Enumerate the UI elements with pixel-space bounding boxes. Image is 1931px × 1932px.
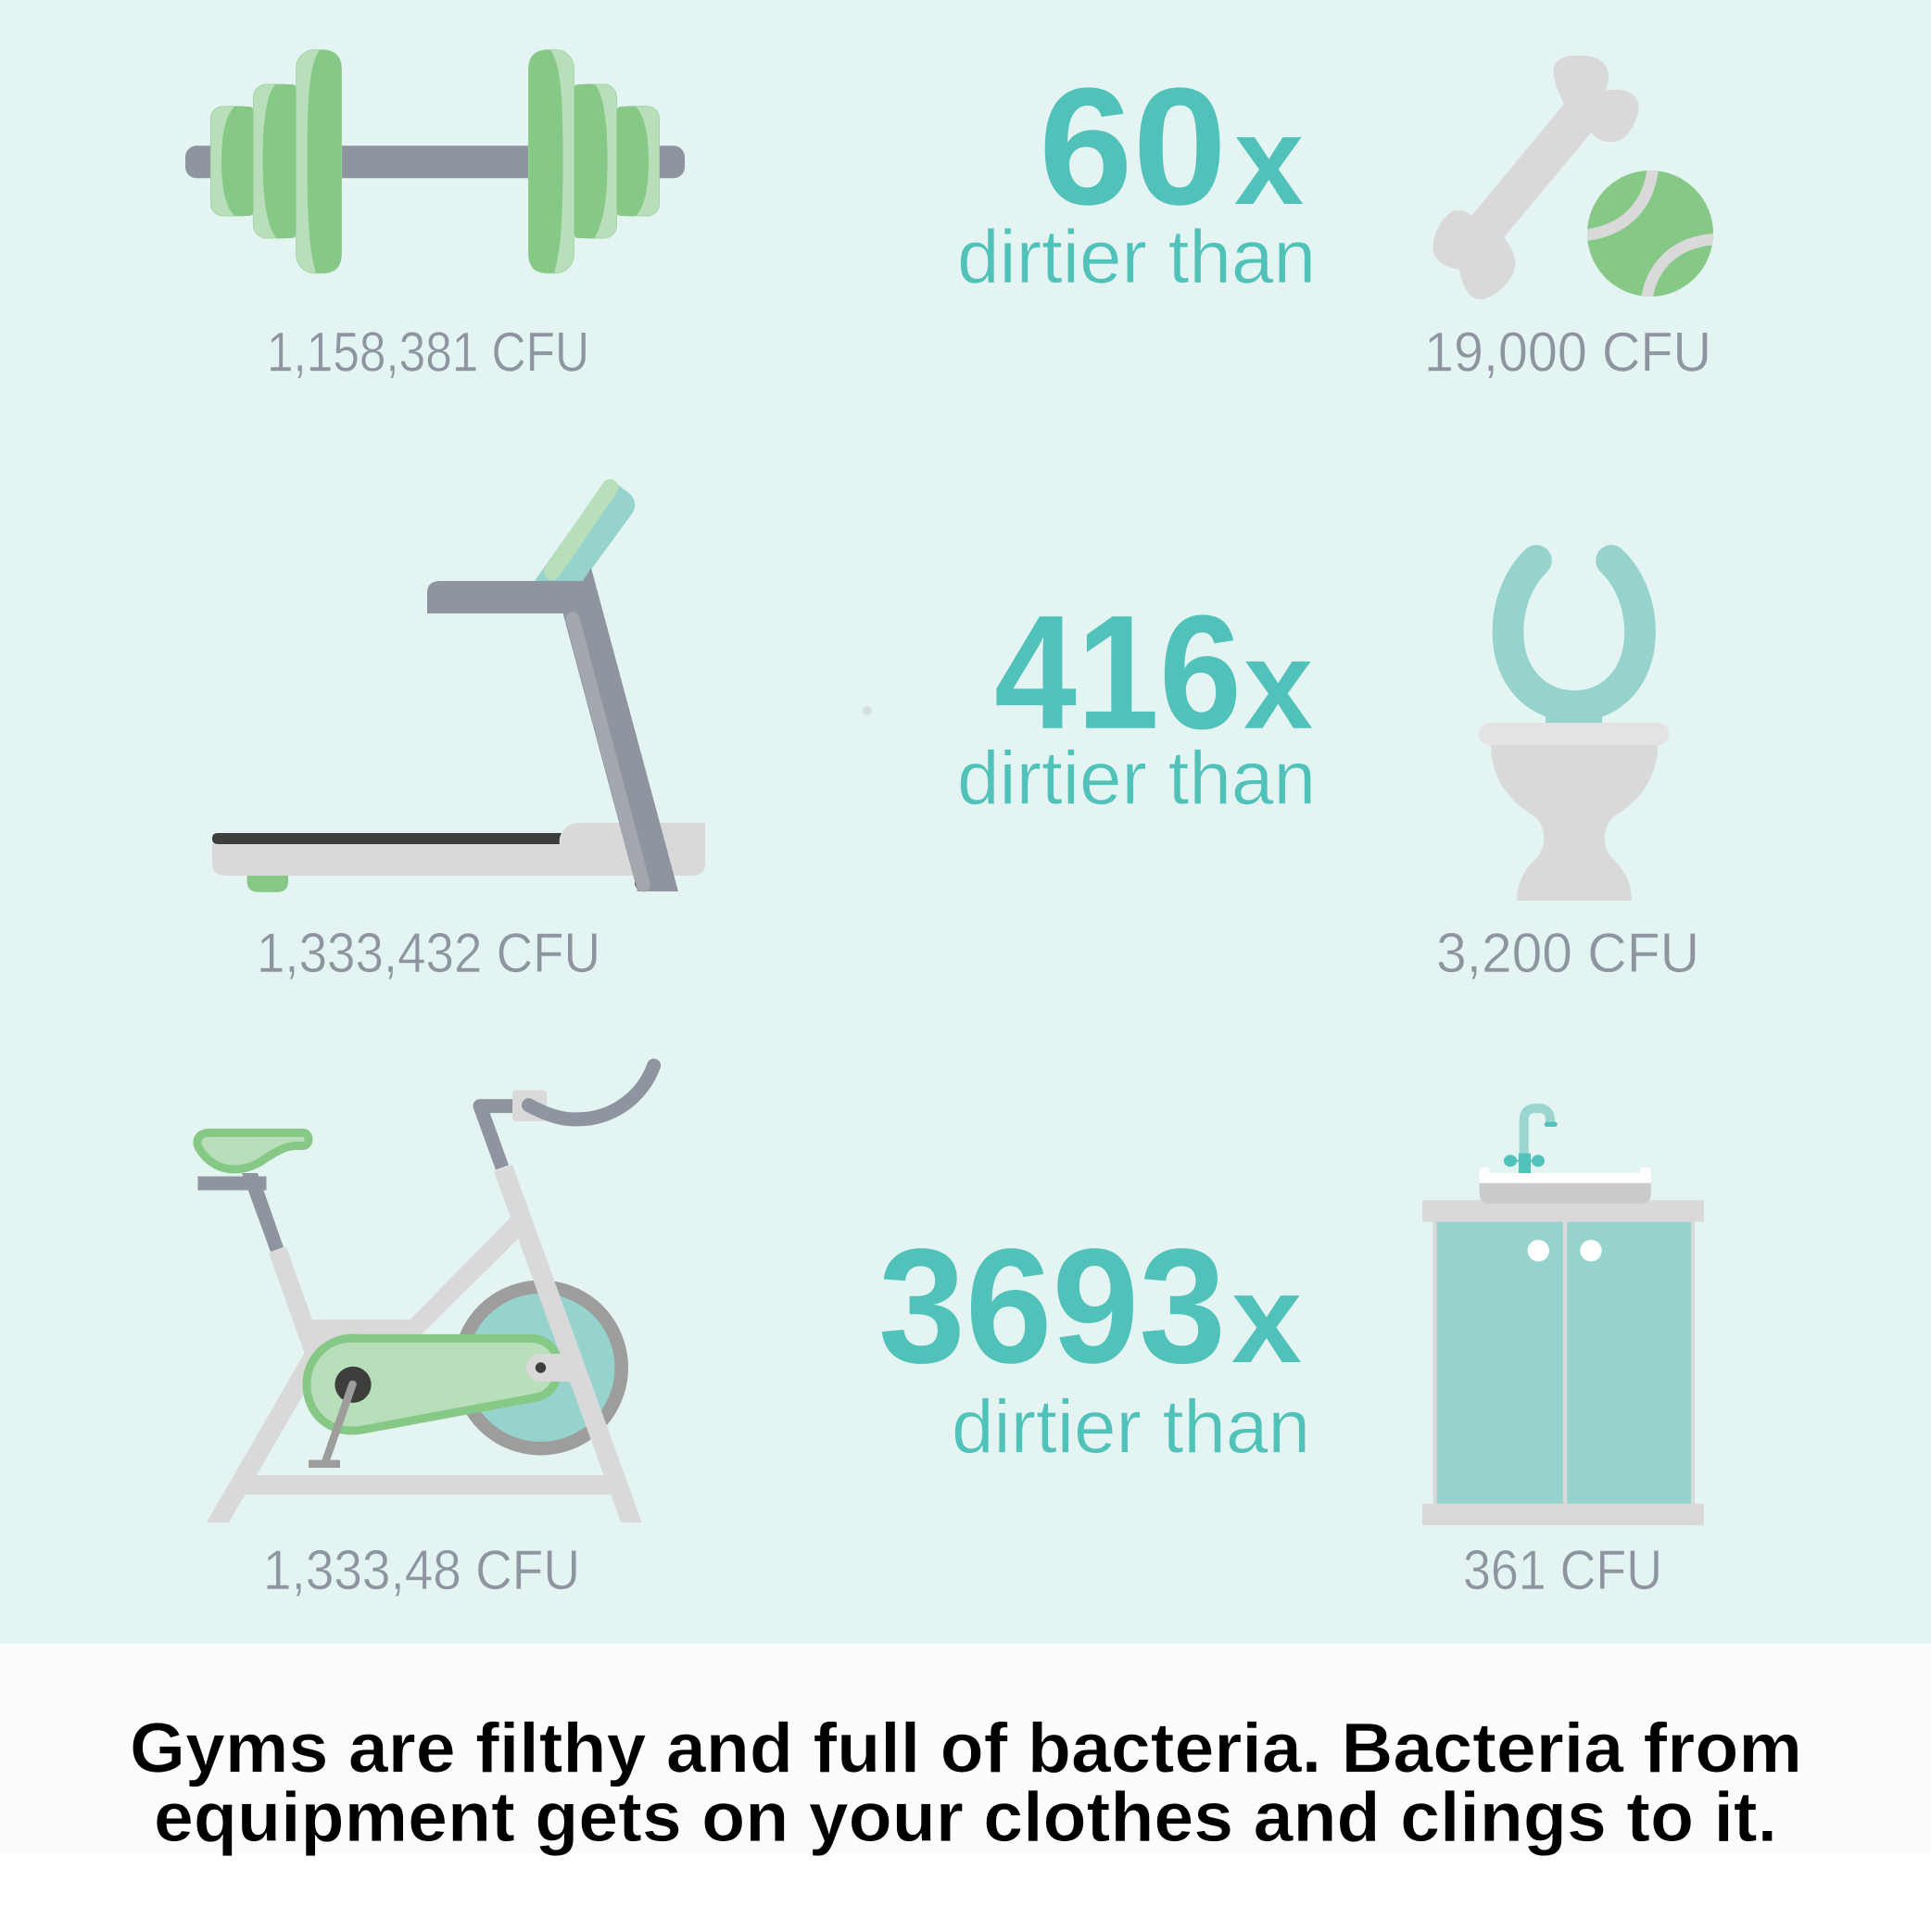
text: dirtier than (row 1): dirtier than <box>957 215 1316 299</box>
icon: bone and tennis ball <box>1432 56 1717 301</box>
label: sink CFU: 361 CFU <box>1463 1539 1662 1601</box>
stat: 60x: 60 <box>1039 54 1227 240</box>
label: treadmill CFU: 1,333,432 CFU <box>257 922 600 984</box>
caption text <box>130 1710 1802 1857</box>
text: dirtier than (row 2): dirtier than <box>957 737 1316 821</box>
label: bike CFU: 1,333,48 CFU <box>263 1539 580 1601</box>
text: dirtier than (row 3): dirtier than <box>952 1385 1310 1470</box>
icon: treadmill <box>212 481 705 892</box>
decorative speck <box>863 706 872 715</box>
stat: 416x: 416 <box>994 583 1242 764</box>
label: toilet CFU: 3,200 CFU <box>1436 922 1699 984</box>
panel: caption band <box>0 1644 1931 1854</box>
caption text: equipment gets on your clothes and clings to it. <box>154 1778 1777 1857</box>
label: bone CFU: 19,000 CFU <box>1424 322 1711 384</box>
caption text: Gyms are filthy and full of bacteria. Bacteria from <box>130 1710 1802 1788</box>
icon: sink cabinet <box>1422 1108 1704 1525</box>
icon: exercise bike <box>197 1066 654 1522</box>
stat: 3693x: 3693 <box>878 1216 1226 1397</box>
stat: 3693x: x <box>1231 1248 1302 1389</box>
stat: 60x: x <box>1234 90 1304 231</box>
stat: 416x: x <box>1243 614 1313 755</box>
icon: dumbbell <box>185 50 685 273</box>
icon: toilet <box>1479 561 1669 901</box>
label: dumbbell CFU: 1,158,381 CFU <box>267 322 589 384</box>
